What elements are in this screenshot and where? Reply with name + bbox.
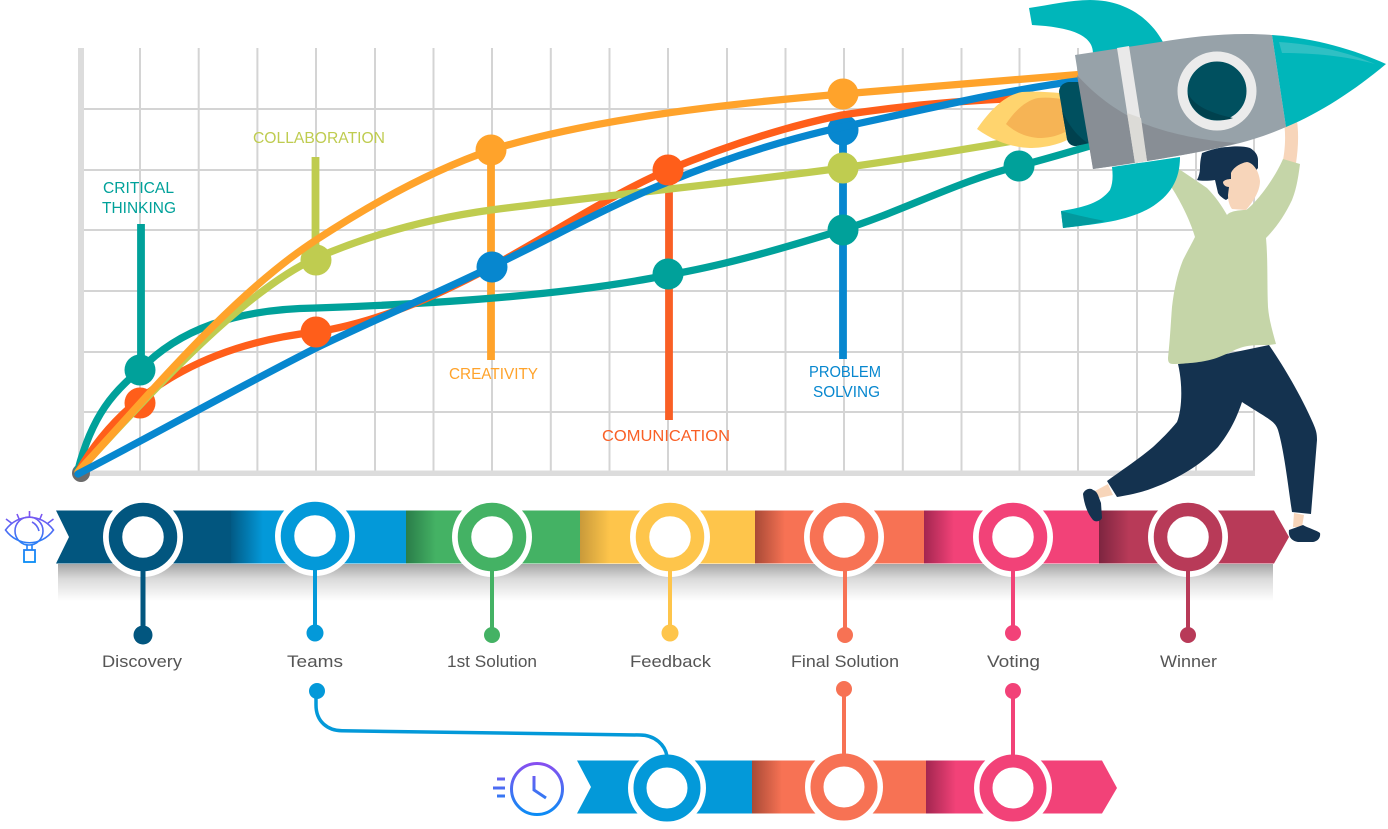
hair — [1197, 146, 1258, 200]
curve: communication — [78, 98, 1030, 472]
nose highlight — [1279, 42, 1375, 64]
skill label: creativity: CREATIVITY — [449, 366, 538, 383]
connector: voting — [1005, 683, 1021, 756]
timeline stage: voting: Voting — [987, 653, 1040, 671]
left foot — [1095, 484, 1113, 498]
main timeline ribbon — [56, 510, 1289, 564]
window shade — [1188, 93, 1233, 120]
timeline stage: feedback — [630, 497, 712, 671]
shirt — [1168, 159, 1300, 364]
nozzle — [1059, 82, 1090, 146]
pants — [1107, 345, 1317, 514]
origin point — [72, 464, 90, 482]
skill label: critical thinking — [102, 180, 176, 217]
timeline stage: discovery: Discovery — [102, 653, 183, 671]
icon: eye with magnifier — [6, 511, 54, 562]
nozzle shade — [1062, 110, 1088, 146]
band shade — [1127, 113, 1147, 163]
skill label: communication: COMUNICATION — [602, 428, 730, 445]
curve: problem solving — [78, 80, 1085, 474]
bottom fin — [1061, 157, 1180, 228]
short timeline stage: teams — [628, 749, 706, 827]
timeline stage: final solution — [791, 497, 899, 671]
icon: clock — [493, 764, 562, 814]
markers under the curves — [124, 114, 858, 418]
timeline stage: final solution: Final Solution — [791, 653, 899, 671]
nose — [1272, 35, 1386, 127]
skill label: critical thinking: THINKING — [102, 200, 176, 217]
skill curves — [78, 74, 1110, 474]
main timeline shadow — [58, 564, 1273, 601]
timeline stage: teams: Teams — [287, 653, 343, 671]
right foot — [1293, 513, 1304, 527]
short timeline stage: voting — [974, 749, 1052, 827]
raised arm skin — [1283, 121, 1298, 163]
curve markers — [124, 78, 1034, 386]
connector: teams to short timeline — [309, 683, 667, 756]
skill label: collaboration: COLLABORATION — [253, 130, 385, 147]
timeline stage: winner: Winner — [1160, 653, 1218, 671]
short timeline ribbon — [577, 760, 1117, 814]
curve: critical thinking — [78, 140, 1110, 470]
body shade — [1077, 75, 1237, 169]
body — [1075, 34, 1286, 169]
skill label: problem solving — [809, 364, 881, 401]
timeline stage: feedback: Feedback — [630, 653, 712, 671]
skill stems — [141, 130, 843, 420]
timeline stage: discovery — [102, 497, 183, 671]
illustration: person lifting rocket — [1083, 121, 1320, 542]
skill label: problem solving: SOLVING — [813, 384, 880, 401]
connector: final solution — [836, 681, 852, 755]
illustration: rocket — [977, 0, 1386, 228]
flame core — [1006, 98, 1065, 138]
flame — [977, 92, 1067, 148]
timeline stage: 1st solution — [447, 497, 537, 671]
window — [1182, 56, 1252, 126]
timeline stage: teams — [275, 496, 355, 671]
skill label: problem solving: PROBLEM — [809, 364, 881, 381]
short timeline stage: final solution — [805, 748, 883, 826]
chart grid — [78, 48, 1255, 476]
timeline stage: voting — [973, 497, 1053, 671]
curve: collaboration — [78, 138, 1030, 472]
skill label: critical thinking: CRITICAL — [103, 180, 174, 197]
timeline stage: 1st solution: 1st Solution — [447, 653, 537, 671]
top fin — [1029, 0, 1163, 53]
timeline stage: winner — [1148, 497, 1228, 671]
bottom fin shade — [1061, 211, 1105, 228]
curve: creativity — [78, 74, 1085, 472]
white band — [1117, 46, 1147, 163]
face — [1223, 162, 1260, 210]
